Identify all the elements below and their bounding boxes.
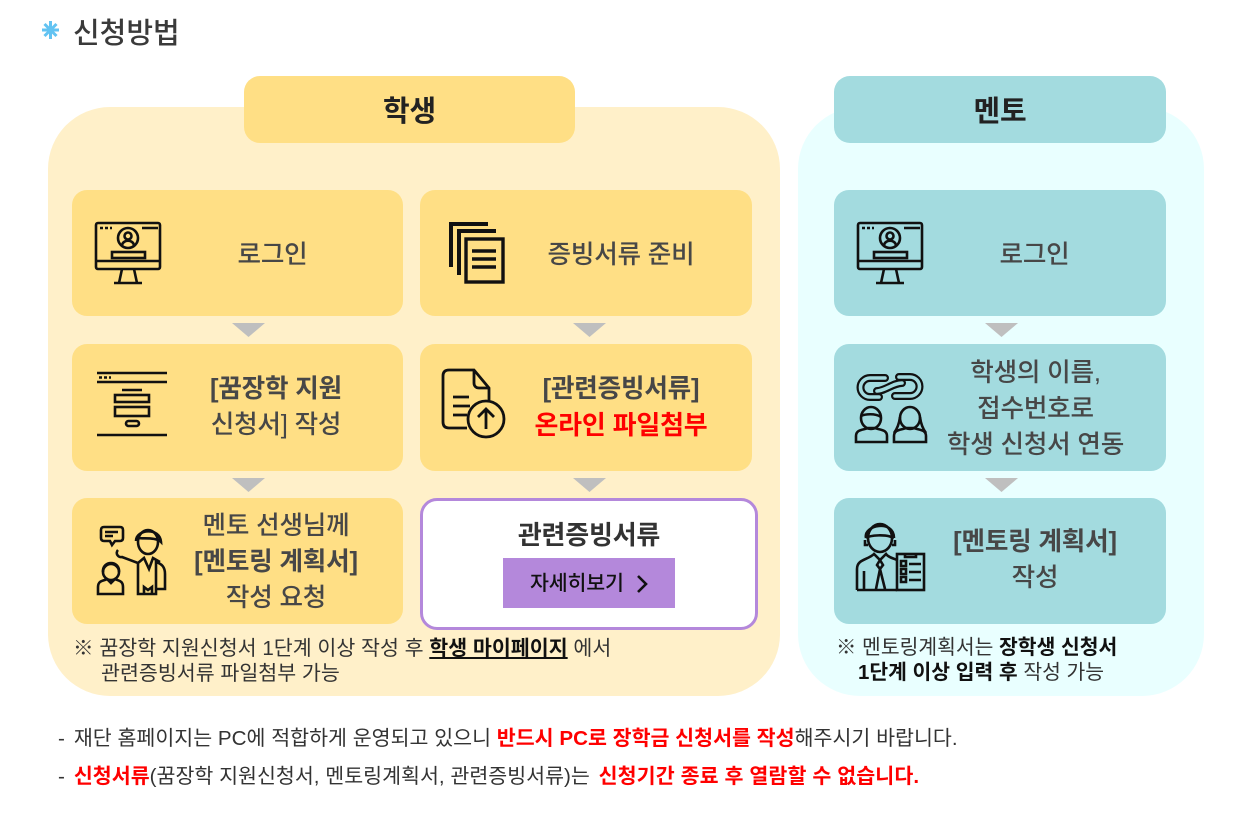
text: 작성 요청: [226, 584, 326, 612]
text: [194, 512, 358, 612]
card: mentor request: [72, 498, 403, 624]
icon: mentor with checklist: [856, 522, 926, 592]
text: 학생 신청서 연동: [947, 430, 1124, 458]
text: 학생의 이름,: [970, 358, 1101, 386]
arrow: [985, 478, 1018, 492]
icon: section asterisk: [42, 21, 59, 39]
note: student: ※ 꿈장학 지원신청서 1단계 이상 작성 후 학생 마이페이지 에서: [73, 637, 611, 660]
arrow: [232, 478, 265, 492]
text: 온라인 파일첨부: [534, 410, 708, 440]
card: link student application: [834, 344, 1166, 471]
button: see details: [503, 558, 675, 608]
panel: student: [48, 107, 780, 696]
card: mentor login: [834, 190, 1166, 316]
text: [꿈장학 지원: [210, 375, 342, 403]
arrow: [573, 323, 606, 337]
text: 로그인: [999, 241, 1070, 269]
note: student: 관련증빙서류 파일첨부 가능: [101, 662, 340, 685]
text: 작성: [1012, 564, 1058, 592]
text: 신청서] 작성: [211, 411, 341, 439]
arrow: [985, 323, 1018, 337]
text: [534, 375, 708, 440]
note: student: [73, 637, 611, 685]
arrow: [232, 323, 265, 337]
text: 멘토 선생님께: [202, 512, 350, 540]
text: 관련증빙서류: [518, 520, 660, 550]
icon: monitor login: [856, 222, 924, 284]
card: mentoring plan: [834, 498, 1166, 624]
icon: teacher and student: [96, 526, 166, 596]
text: [210, 375, 342, 439]
card: related documents: [420, 498, 758, 630]
heading: student: 학생: [383, 96, 436, 128]
text: 로그인: [237, 241, 308, 269]
icon: document stack: [449, 222, 505, 284]
text: [멘토링 계획서]: [194, 548, 358, 576]
notice line 2: - 신청서류(꿈장학 지원신청서, 멘토링계획서, 관련증빙서류)는 신청기간 종료 후 열람할 수 없습니다.: [58, 765, 919, 788]
title: 신청방법: [73, 18, 180, 50]
note: mentor: ※ 멘토링계획서는 장학생 신청서: [836, 637, 1117, 659]
panel: mentor: [798, 107, 1204, 696]
notice line 1: - 재단 홈페이지는 PC에 적합하게 운영되고 있으니 반드시 PC로 장학금 신청서를 작성해주시기 바랍니다.: [58, 727, 958, 750]
icon: monitor login: [94, 222, 162, 284]
text: 증빙서류 준비: [548, 241, 694, 269]
card: file upload: [420, 344, 752, 471]
icon: file upload: [442, 368, 506, 438]
card: documents preparation: [420, 190, 752, 316]
text: [관련증빙서류]: [543, 375, 699, 403]
icon: link and people: [854, 373, 928, 444]
text: 접수번호로: [977, 394, 1094, 422]
icon: form page: [97, 372, 167, 436]
note: mentor: [836, 636, 1117, 684]
arrow: [573, 478, 606, 492]
icon: chevron: [637, 575, 648, 593]
button: see details: 자세히보기: [530, 572, 624, 595]
heading: mentor: 멘토: [974, 96, 1026, 128]
card: student login: [72, 190, 403, 316]
text: [947, 358, 1124, 458]
card: student application: [72, 344, 403, 471]
heading: mentor: [834, 76, 1166, 143]
note: mentor: 1단계 이상 입력 후 작성 가능: [858, 662, 1104, 684]
text: [953, 528, 1117, 592]
text: [멘토링 계획서]: [953, 528, 1117, 556]
heading: student: [244, 76, 575, 143]
